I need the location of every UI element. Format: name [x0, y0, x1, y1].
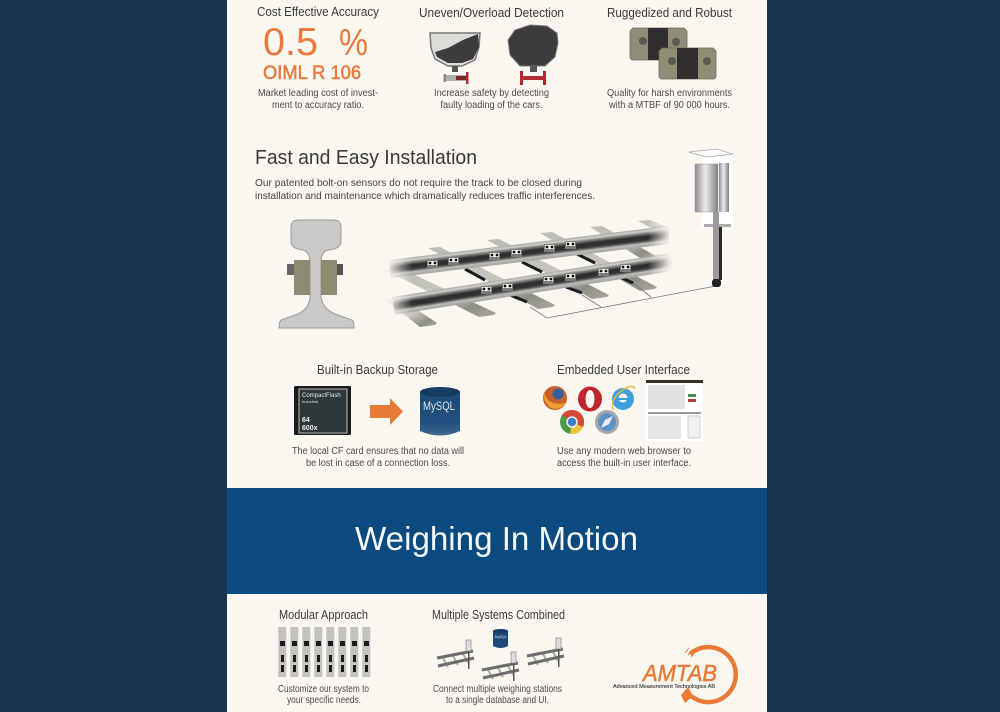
diagram: roadside sensor cabinet on pole [689, 149, 733, 287]
diagram: rail cross-section with clamp [279, 220, 354, 328]
description: multiple systems: to a single database and UI. [446, 695, 549, 706]
description: rugged: Quality for harsh environments [607, 88, 732, 99]
section: modular approach [278, 608, 370, 706]
column: ruggedized and robust [607, 6, 732, 111]
banner: weighing in motion: Weighing In Motion [355, 520, 638, 557]
icon: small database: MySQL [495, 635, 507, 639]
logo: AMTAB: Advanced Measurement Technologies AB [613, 684, 715, 690]
icon: MySQL database cylinder: MySQL [423, 399, 455, 413]
icon: track station two [482, 652, 519, 681]
heading: multiple systems combined: Multiple Systems Combined [432, 608, 565, 622]
heading: built-in backup storage: Built-in Backup Storage [317, 363, 438, 377]
icon: track station one [437, 640, 474, 669]
section: fast and easy installation [255, 147, 733, 328]
icon: compact flash card: 600x [302, 425, 318, 432]
section: built-in backup storage [292, 363, 464, 469]
section: embedded user interface [543, 363, 703, 469]
description: accuracy: ment to accuracy ratio. [272, 100, 364, 111]
icon: opera [578, 386, 602, 412]
icon: safari [595, 410, 619, 434]
description: user interface: Use any modern web browser to [557, 446, 692, 457]
heading: cost effective accuracy: Cost Effective Accuracy [257, 5, 380, 19]
description: backup: be lost in case of a connection loss. [306, 458, 450, 469]
icon: compact flash card: CompactFlash [302, 393, 341, 399]
heading: embedded user interface: Embedded User Interface [557, 363, 690, 377]
description: backup: The local CF card ensures that no data will [292, 446, 464, 457]
icon: compact flash card: Industrial [302, 399, 318, 404]
body text: installation: Our patented bolt-on sensors do not require the track to be closed during [255, 177, 582, 189]
heading: fast and easy installation: Fast and Easy Installation [255, 147, 477, 169]
screenshot: web user interface [646, 380, 703, 441]
icon: MySQL database cylinder [420, 387, 460, 436]
description: multiple systems: Connect multiple weighing stations [433, 684, 562, 695]
section: multiple systems combined [432, 608, 565, 706]
description: detection: faulty loading of the cars. [440, 100, 542, 111]
icon: compact flash card [294, 386, 351, 435]
heading: uneven overload detection: Uneven/Overload Detection [419, 6, 564, 20]
percent sign: % [339, 22, 368, 63]
icon: firefox [543, 386, 567, 410]
heading: modular approach: Modular Approach [279, 608, 368, 622]
description: accuracy: Market leading cost of invest- [258, 88, 378, 99]
big number: 0.5: 0.5 [263, 21, 318, 64]
description: user interface: access the built-in user interface. [557, 458, 691, 469]
column: cost effective accuracy [257, 5, 380, 111]
arrow: card to database [370, 398, 403, 425]
banner: weighing in motion [227, 488, 767, 594]
content panel [227, 0, 767, 712]
body text: installation: installation and maintenance which dramatically reduces traffic interferences. [255, 190, 595, 202]
icon: internet explorer [612, 386, 635, 410]
icon: chrome [560, 410, 584, 434]
icon: sensor blocks [630, 28, 716, 79]
description: modular: your specific needs. [287, 695, 361, 706]
icon: row of rack modules [278, 627, 370, 677]
description: rugged: with a MTBF of 90 000 hours. [608, 100, 730, 111]
icon: unevenly loaded hopper car [430, 33, 480, 84]
icon: overloaded hopper car [508, 25, 558, 85]
heading: ruggedized and robust: Ruggedized and Robust [607, 6, 732, 20]
description: detection: Increase safety by detecting [434, 88, 549, 99]
diagram: railway track with sensors [383, 215, 716, 327]
description: modular: Customize our system to [278, 684, 369, 695]
logo: AMTAB [613, 647, 736, 703]
standard label: OIML R 106: OIML R 106 [263, 63, 361, 84]
logo: AMTAB: AMTAB [641, 660, 717, 686]
column: uneven overload detection [419, 6, 564, 111]
icon: compact flash card: 64 [302, 417, 310, 424]
icon: track station three [527, 638, 564, 667]
